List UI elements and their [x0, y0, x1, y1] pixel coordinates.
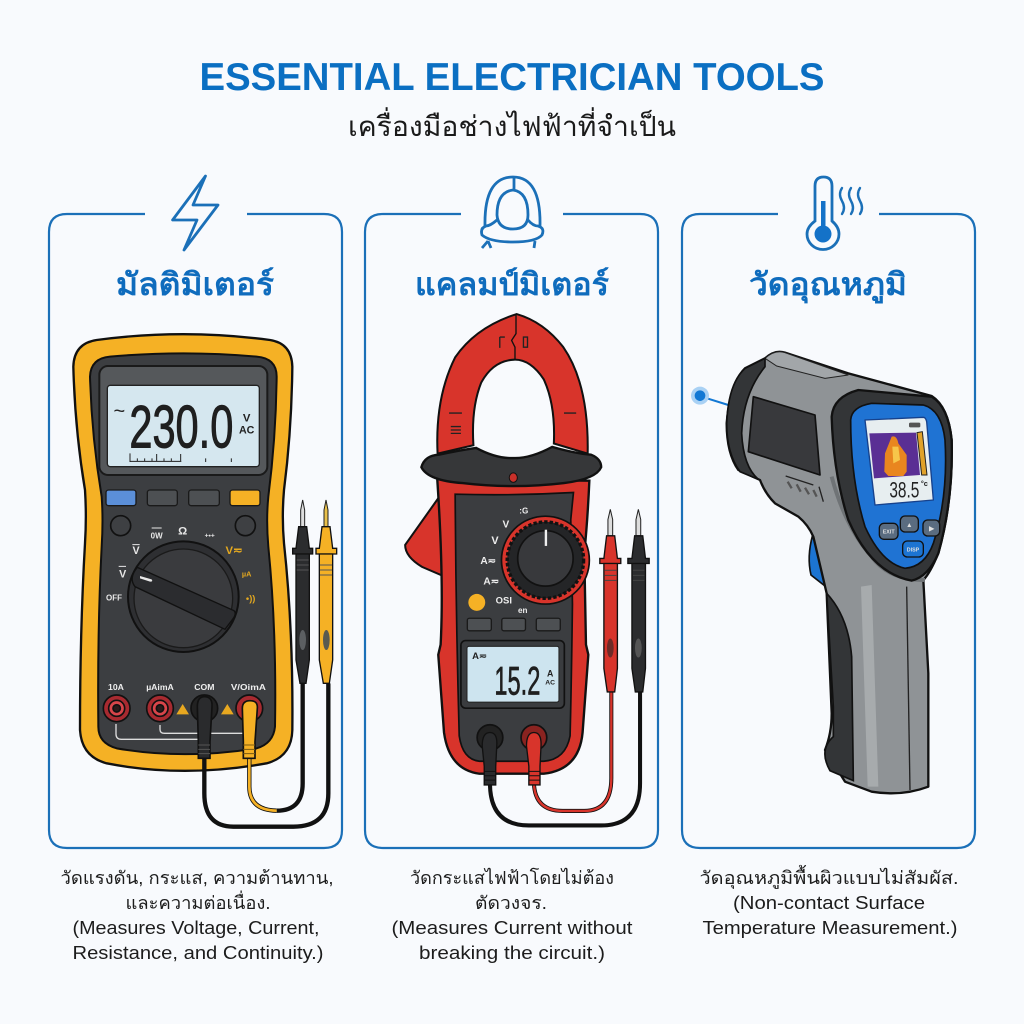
illustration: multimeter: 10A [108, 682, 125, 692]
test leads [477, 509, 649, 825]
description: clamp meter: breaking the circuit.) [419, 943, 605, 963]
illustration: multimeter: ~ [113, 400, 125, 422]
test leads [197, 500, 337, 827]
illustration: multimeter: •)) [246, 593, 255, 603]
description: clamp meter: วัดกระแสไฟฟ้าโดยไม่ต้อง [410, 867, 614, 888]
description: clamp meter [392, 867, 632, 963]
illustration: clamp meter: 15.2 [494, 660, 540, 704]
description: clamp meter: ตัดวงจร. [475, 893, 547, 913]
heading: multimeter: มัลติมิเตอร์ [116, 267, 274, 302]
heading: clamp meter: แคลมป์มิเตอร์ [415, 267, 609, 302]
icon: lightning bolt [173, 176, 218, 250]
illustration: multimeter: Ω [178, 525, 187, 537]
description: thermometer: วัดอุณหภูมิพื้นผิวแบบไม่สัมผัส. [700, 865, 958, 889]
illustration: multimeter: µAimA [146, 682, 175, 692]
illustration: multimeter: V [132, 545, 140, 557]
illustration: multimeter: +•+ [205, 532, 215, 539]
icon: clamp [482, 177, 543, 248]
illustration: clamp meter: V [491, 535, 499, 547]
illustration: infrared thermometer: ▲ [906, 522, 913, 529]
illustration: clamp meter: A≂ [483, 576, 499, 587]
description: clamp meter: (Measures Current without [392, 918, 632, 938]
illustration: clamp meter: :G [519, 506, 528, 515]
illustration: infrared thermometer: ▶ [928, 525, 935, 532]
illustration: clamp meter: OSI [496, 595, 512, 606]
illustration: infrared thermometer: 38.5 [889, 478, 919, 503]
illustration: multimeter: V≂ [225, 545, 243, 557]
illustration: multimeter: 0W [151, 532, 163, 541]
description: thermometer [700, 865, 958, 938]
icon: thermometer [807, 177, 862, 250]
illustration: multimeter: AC [239, 425, 255, 437]
description: thermometer: Temperature Measurement.) [702, 918, 958, 938]
illustration: clamp meter: A≂ [472, 651, 487, 662]
description: thermometer: (Non-contact Surface [733, 893, 925, 913]
title: ESSENTIAL ELECTRICIAN TOOLS [200, 56, 824, 99]
heading: thermometer: วัดอุณหภูมิ [749, 267, 907, 304]
panel: multimeter [49, 176, 342, 963]
illustration: clamp meter [405, 314, 649, 825]
illustration: infrared thermometer: EXIT [883, 530, 895, 536]
illustration: clamp meter: AC [545, 680, 555, 687]
illustration: multimeter: V [119, 568, 127, 580]
illustration: clamp meter: A [547, 668, 554, 678]
panel: infrared thermometer [682, 177, 975, 938]
illustration: infrared thermometer: °c [921, 479, 928, 488]
illustration: multimeter: µA [242, 570, 252, 579]
illustration: multimeter: V [243, 413, 251, 425]
illustration: clamp meter: A≂ [480, 556, 496, 567]
illustration: multimeter: V/OimA [231, 682, 267, 692]
subtitle: เครื่องมือช่างไฟฟ้าที่จำเป็น [348, 107, 676, 142]
illustration: multimeter: 230.0 [129, 392, 233, 460]
illustration: clamp meter: en [518, 606, 528, 615]
description: multimeter: Resistance, and Continuity.) [72, 943, 324, 963]
illustration: multimeter: OFF [106, 594, 122, 603]
illustration: infrared thermometer [691, 352, 952, 793]
panel: clamp meter [365, 177, 658, 963]
illustration: multimeter: COM [194, 682, 214, 692]
description: multimeter: วัดแรงดัน, กระแส, ความต้านทาน, [60, 868, 333, 888]
description: multimeter [60, 868, 333, 963]
description: multimeter: และความต่อเนื่อง. [126, 890, 270, 913]
description: multimeter: (Measures Voltage, Current, [72, 918, 320, 938]
illustration: multimeter [73, 334, 337, 827]
illustration: infrared thermometer: DISP [907, 547, 920, 553]
illustration: clamp meter: V [502, 519, 509, 530]
